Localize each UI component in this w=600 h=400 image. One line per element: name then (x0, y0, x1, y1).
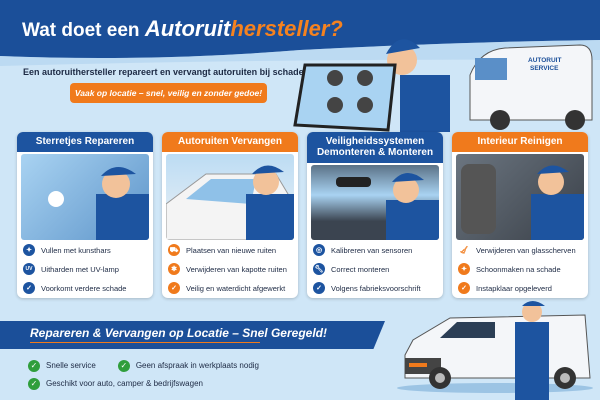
hero illustration: mechanic with windshield and van: SERVICE (530, 65, 559, 72)
card 4: ✦ (461, 266, 467, 273)
card 3: Kalibreren van sensoren (331, 246, 412, 254)
card 3: Demonteren & Monteren (317, 147, 433, 158)
card 2: Plaatsen van nieuwe ruiten (186, 246, 276, 254)
header background (0, 0, 600, 66)
card 2: ✓ (171, 285, 177, 292)
card 3: Volgens fabrieksvoorschrift (331, 284, 421, 292)
card 3: Correct monteren (331, 264, 389, 274)
card 1: Vullen met kunsthars (41, 246, 111, 254)
benefits list: Snelle service Geen afspraak in werkplaats nodig (46, 361, 259, 370)
card 3: ✓ (316, 285, 322, 292)
card 3: Veiligheidssystemen (326, 136, 424, 147)
card 2: Verwijderen van kapotte ruiten (186, 264, 287, 274)
card 2: ⛟ (170, 246, 178, 254)
card 4 (452, 132, 588, 298)
card 4: ✓ (461, 285, 467, 292)
orange pill (70, 83, 267, 103)
benefits list (28, 360, 259, 390)
card 3 (307, 132, 443, 298)
card 1: UV (26, 266, 32, 272)
card 2: ✱ (171, 266, 177, 273)
card 1: ✓ (26, 285, 32, 292)
hero illustration: mechanic with windshield and van (293, 44, 592, 132)
benefits list: ✓ (31, 361, 37, 370)
title: Wat doet een Autoruithersteller? (22, 16, 343, 41)
card 1: Sterretjes Repareren (36, 136, 134, 147)
card 4: 🧹︎ (460, 247, 468, 254)
card 1 (17, 132, 153, 298)
bottom banner (0, 321, 385, 349)
card 2 (162, 132, 298, 298)
card 4: Interieur Reinigen (477, 136, 562, 147)
van with mechanic (397, 301, 593, 400)
card 4: Instapklaar opgeleverd (476, 284, 552, 292)
benefits list: Geschikt voor auto, camper & bedrijfswagen (46, 379, 203, 388)
card 2: Autoruiten Vervangen (178, 136, 282, 147)
hero illustration: mechanic with windshield and van: AUTORUIT (528, 57, 561, 64)
banner text: Repareren & Vervangen op Locatie – Snel Geregeld! (30, 326, 327, 340)
image (21, 154, 149, 240)
card 3: ◎ (316, 247, 322, 254)
card 4: Verwijderen van glasscherven (476, 246, 576, 254)
subtitle: Een autoruithersteller repareert en vervangt autoruiten bij schade. (23, 67, 306, 77)
benefits list: ✓ (120, 361, 127, 370)
orange pill: Vaak op locatie – snel, veilig en zonder gedoe! (75, 88, 262, 98)
card 1: Uitharden met UV-lamp (41, 264, 119, 274)
card 2: Veilig en waterdicht afgewerkt (186, 284, 285, 292)
benefits list: ✓ (31, 379, 37, 388)
card 1: ✦ (26, 247, 32, 254)
card 3: 🔧︎ (315, 266, 323, 273)
card 4: Schoonmaken na schade (476, 264, 561, 274)
card 1: Voorkomt verdere schade (41, 284, 126, 292)
